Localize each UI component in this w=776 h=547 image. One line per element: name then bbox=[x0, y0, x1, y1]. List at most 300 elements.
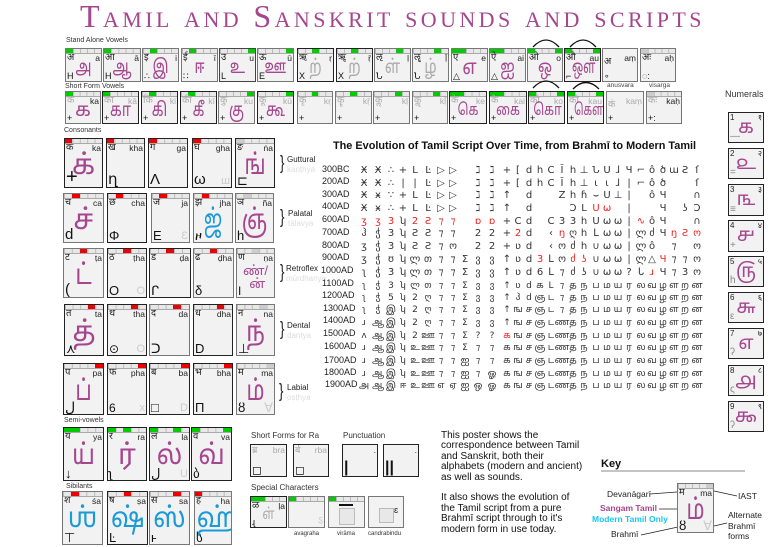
numeral 3 bbox=[728, 184, 764, 216]
cell: nga: ṅa bbox=[264, 143, 273, 153]
cell: kii: की bbox=[182, 95, 192, 106]
cell: na bbox=[236, 304, 275, 356]
label: guttural: kaṇṭhya bbox=[287, 165, 315, 174]
cell: kau: kau bbox=[588, 96, 602, 106]
text block: description: as well as sounds. bbox=[441, 472, 523, 483]
label: retroflex: mūrdhanya bbox=[286, 274, 326, 283]
cell: ya bbox=[63, 427, 104, 481]
cell: sa bbox=[149, 491, 190, 545]
cell: ba: □ bbox=[151, 400, 159, 415]
cell: la: U bbox=[180, 468, 188, 480]
cell: ga: Λ bbox=[150, 171, 160, 188]
cell: kuu: + bbox=[259, 113, 264, 123]
cell: r: ṛ bbox=[329, 53, 332, 63]
cell: kr: कृ bbox=[299, 95, 306, 106]
cell: kaa: का bbox=[104, 95, 114, 106]
cell: cha bbox=[107, 193, 147, 243]
numeral 7: ७ bbox=[758, 329, 762, 338]
cell: rr: ṝ bbox=[368, 53, 371, 63]
cell: jha: jha bbox=[220, 198, 231, 208]
cell: gha: gha bbox=[216, 143, 230, 153]
heading: special characters: Special Characters bbox=[251, 483, 319, 492]
numeral 8: ௮ bbox=[735, 370, 757, 391]
label: alternate brahmi forms bbox=[728, 510, 762, 541]
cell: rr bbox=[336, 48, 373, 82]
cell: am bbox=[602, 48, 638, 82]
cell: gha: ω bbox=[194, 171, 206, 188]
cell: tta: ( bbox=[65, 281, 70, 298]
cell: ke: के bbox=[451, 95, 458, 106]
numeral 6: ६ bbox=[758, 293, 762, 302]
cell: kam: कं bbox=[608, 99, 615, 110]
heading: consonants: Consonants bbox=[64, 127, 101, 134]
row 1500AD bbox=[323, 328, 703, 341]
cell: au: औ bbox=[566, 52, 576, 63]
cell: ta: ⋏ bbox=[66, 341, 76, 356]
cell: l: Ն bbox=[376, 71, 383, 81]
cell: kah: kaḥ bbox=[666, 96, 680, 106]
cell: kuu bbox=[257, 91, 294, 124]
row 1000AD: ʅჭ3ʮლთ⁊⁊Σვვ↑ʋd6ᒪ⁊ძʖ∪ωω?ᒐ ɹ Ч⁊3ო bbox=[362, 266, 701, 278]
cell: ko: को bbox=[530, 95, 540, 106]
numeral 6: ௬ bbox=[736, 297, 756, 318]
cell: rba: rba bbox=[315, 445, 327, 455]
cell: pha bbox=[107, 363, 147, 415]
panel: semi-vowels bbox=[63, 427, 232, 481]
cell: va: va bbox=[221, 432, 230, 442]
cell: dda: ᒋ bbox=[151, 283, 159, 298]
cell: kah bbox=[646, 91, 682, 124]
cell: dda: ड bbox=[151, 252, 156, 263]
cell: au: au bbox=[590, 53, 599, 63]
cell: kuu: कू bbox=[259, 95, 266, 106]
cell: kuu: கூ bbox=[266, 100, 285, 121]
cell: pha: pha bbox=[131, 368, 145, 378]
cell: candrabindu bbox=[368, 496, 404, 528]
cell: ssa: ष bbox=[109, 495, 114, 506]
cell: i: இ bbox=[152, 57, 169, 78]
cell: kr bbox=[297, 91, 333, 124]
key cell: ma bbox=[700, 488, 712, 498]
cell: kl: kḷ bbox=[402, 96, 408, 106]
cell: ra: र bbox=[109, 431, 113, 442]
cell: da: ᑐ bbox=[151, 341, 160, 356]
cell: ai: ai bbox=[517, 53, 524, 63]
text block: description: alphabets (modern and ancient) bbox=[441, 461, 582, 472]
cell: kai: kai bbox=[514, 96, 525, 106]
numeral 9: ௯ bbox=[735, 406, 757, 427]
panel: special characters bbox=[250, 496, 404, 528]
row 700AD: ჰჭ3ʮƧƧ⁊⁊ 22+ 2 d ‹ ŋ ღhᒪωω|ლძЧ ŋƧო bbox=[361, 227, 701, 239]
cell: ga: ग bbox=[150, 142, 155, 153]
cell: nya bbox=[235, 193, 274, 243]
label: retroflex bbox=[280, 262, 326, 283]
cell: ha: ს bbox=[196, 530, 203, 545]
row 1500AD: 1500AD bbox=[323, 328, 356, 338]
cell: ma: ȣ bbox=[238, 400, 245, 415]
label: palatal bbox=[280, 207, 314, 228]
numeral 5: ௫ bbox=[736, 261, 756, 282]
label: sangam tamil: Sangam Tamil bbox=[600, 503, 657, 513]
cell: ah bbox=[640, 48, 676, 82]
cell: sha: ⊤ bbox=[64, 530, 75, 545]
cell: ssa: ஷ் bbox=[111, 502, 144, 533]
numeral 1: १ bbox=[758, 113, 762, 122]
cell: danda: | bbox=[344, 459, 348, 476]
row 1900AD: அஆஇஈஉஊஎஏஐஒஓகஙசஞடணதநபமயரலவழளறன bbox=[359, 380, 703, 391]
cell: la: ل bbox=[151, 466, 160, 481]
cell: tta bbox=[63, 248, 104, 298]
row 200AD: ӾӾ∴||Ŀ▷▷ ℷℷ+[dhCĪh⊥ιιɺ|⌐ôծ ſ bbox=[361, 176, 699, 189]
cell: gha: घ bbox=[194, 142, 200, 153]
icon: combination arcs bbox=[532, 39, 600, 90]
cell: ha: ह bbox=[196, 495, 201, 506]
cell: ja: E bbox=[153, 228, 162, 243]
cell: ah: अः bbox=[642, 52, 651, 63]
cell: tta: ट bbox=[65, 252, 70, 263]
cell: ai: △ bbox=[491, 71, 498, 81]
label: guttural: } bbox=[280, 153, 284, 174]
cell: ma bbox=[236, 363, 275, 415]
cell: ko: கொ bbox=[533, 102, 562, 119]
cell: nga: ङ bbox=[237, 142, 243, 153]
numeral 3: ३ bbox=[758, 185, 762, 194]
cell: sha: śa bbox=[92, 496, 101, 506]
cell: ka consonant: क bbox=[66, 142, 73, 153]
cell: nya: h bbox=[237, 228, 244, 243]
cell: ka bbox=[65, 91, 101, 124]
row 1200AD: ʅჭ5ʮ2ღ⁊⁊Σვვ↑ჰdஞட⁊தநபமயரலவழளறன bbox=[362, 292, 703, 303]
cell: pha: फ bbox=[109, 367, 116, 378]
cell: ah: ◌: bbox=[642, 71, 650, 81]
label: candrabindu: candrabindu bbox=[368, 531, 401, 537]
numeral 7: ʔ bbox=[730, 347, 735, 358]
text block: description: correspondence between Tamil bbox=[441, 440, 579, 451]
cell: ttha: ठ bbox=[109, 252, 115, 263]
numeral 1 bbox=[728, 112, 764, 143]
label: avagraha: avagraha bbox=[294, 531, 319, 537]
cell: da bbox=[149, 304, 190, 356]
numeral 3: ௩ bbox=[737, 189, 755, 210]
cell: u: u bbox=[249, 53, 254, 63]
label: alternate brahmi forms: Alternate bbox=[728, 510, 762, 520]
numeral 5: ५ bbox=[758, 257, 762, 266]
cell: bra: bra bbox=[273, 445, 285, 455]
cell: ll bbox=[412, 48, 449, 82]
cell: kll bbox=[412, 91, 448, 124]
numeral 8: ς bbox=[730, 384, 735, 395]
label: dental: } bbox=[280, 319, 284, 340]
cell: kll: + bbox=[414, 113, 419, 123]
cell: lla: ळ bbox=[252, 500, 259, 511]
cell: ki: ki bbox=[170, 96, 176, 106]
cell: dha: dha bbox=[217, 309, 231, 319]
label: palatal: } bbox=[280, 207, 284, 228]
cell: tha: tha bbox=[133, 309, 145, 319]
cell: ka consonant: க் bbox=[72, 149, 95, 180]
cell: kll: कॣ bbox=[414, 95, 421, 106]
cell: ja: ज bbox=[153, 197, 160, 208]
cell: ya: ய் bbox=[72, 439, 95, 470]
cell: ta: त bbox=[66, 308, 71, 319]
cell: krr bbox=[335, 91, 372, 124]
cell: double danda: || bbox=[385, 459, 394, 476]
cell: cha: Φ bbox=[109, 228, 119, 243]
cell: ba bbox=[149, 363, 190, 415]
cell: ii: ∷ bbox=[183, 71, 189, 81]
cell: u: उ bbox=[221, 52, 226, 63]
cell: bha: bha bbox=[217, 368, 231, 378]
cell: dda bbox=[149, 248, 191, 298]
cell: uu bbox=[257, 48, 294, 82]
label: palatal: tālavya bbox=[288, 219, 313, 228]
panel: stand alone vowels bbox=[65, 48, 676, 82]
cell: kaa: கா bbox=[110, 100, 131, 121]
cell: nna: ண்/ bbox=[243, 263, 268, 278]
label: devanagari: Devanāgarī bbox=[607, 489, 651, 499]
cell: uu: ஊ bbox=[265, 57, 286, 78]
cell: r: X bbox=[299, 71, 305, 81]
label: guttural bbox=[280, 153, 315, 174]
cell: krr: + bbox=[337, 113, 342, 123]
numeral 9: 9 bbox=[730, 402, 734, 411]
numeral 4: ௪ bbox=[737, 225, 755, 246]
cell: kl: कॢ bbox=[375, 95, 382, 106]
cell: nga bbox=[235, 138, 275, 188]
cell: danda: . bbox=[374, 445, 376, 455]
cell: ca bbox=[63, 193, 104, 243]
row 1800AD: ɹஆஇʮஉஊ⁊⁊ஐ⁊ஓகஙசஞடணதநபமயரலவழளறன bbox=[362, 368, 703, 379]
label: modern tamil only: Modern Tamil Only bbox=[592, 514, 668, 524]
cell: dha bbox=[193, 304, 233, 356]
row 1400AD: ɹஆஇʮ2ღ⁊⁊Σვვ↑ஙசஞடணதநபமயரலவழளறன bbox=[362, 317, 703, 328]
cell: a: अ bbox=[67, 52, 74, 63]
cell: ai: ஐ bbox=[500, 57, 515, 78]
cell: am: ∘ bbox=[604, 71, 610, 81]
heading: punctuation: Punctuation bbox=[343, 431, 385, 440]
cell: ga bbox=[148, 138, 188, 188]
row 700AD: 700AD bbox=[322, 227, 350, 237]
numeral 8: ८ bbox=[758, 366, 762, 375]
row 1400AD bbox=[323, 315, 703, 328]
cell: kai: + bbox=[491, 113, 496, 123]
cell: ke: + bbox=[451, 113, 456, 123]
cell: a: a bbox=[95, 53, 100, 63]
numeral 5 bbox=[728, 256, 764, 287]
cell: nya: ஞ் bbox=[242, 204, 267, 235]
cell: pa: प bbox=[65, 367, 70, 378]
cell: na: na bbox=[264, 309, 273, 319]
cell: ku: कु bbox=[220, 95, 227, 106]
cell: tha: O bbox=[136, 343, 145, 355]
cell: la: la bbox=[181, 432, 188, 442]
cell: kii: கீ bbox=[193, 100, 204, 121]
heading: semi-vowels: Semi-vowels bbox=[64, 417, 104, 424]
cell: nna bbox=[236, 248, 275, 298]
numeral 3: 3 bbox=[730, 185, 734, 194]
cell: ra: ra bbox=[137, 432, 145, 442]
cell: sa: sa bbox=[179, 496, 188, 506]
row 1900AD: 1900AD bbox=[325, 379, 358, 389]
cell: ka consonant: + bbox=[66, 166, 78, 188]
cell: ta bbox=[64, 304, 104, 356]
cell: ki: + bbox=[143, 113, 148, 123]
cell: da: द bbox=[151, 308, 156, 319]
cell: bra: ◻ bbox=[252, 463, 262, 477]
cell: ya: ya bbox=[93, 432, 102, 442]
cell: kii: kī bbox=[208, 96, 215, 106]
cell: va bbox=[191, 427, 232, 481]
numeral 2: = bbox=[730, 167, 736, 178]
cell: na: न bbox=[238, 308, 243, 319]
cell: ra: ʅ bbox=[109, 466, 112, 481]
label: brahmi: Brahmī bbox=[611, 529, 638, 539]
cell: nna: ण bbox=[238, 252, 245, 263]
cell: nya: ña bbox=[263, 198, 272, 208]
numeral 9: ९ bbox=[758, 402, 762, 411]
cell: ka: क bbox=[67, 95, 74, 106]
key cell bbox=[677, 483, 714, 533]
cell: nya: ञ bbox=[237, 197, 244, 208]
cell: ya: य bbox=[65, 431, 71, 442]
numeral 7 bbox=[728, 328, 764, 359]
cell: aa bbox=[103, 48, 141, 82]
cell: sha: ஶ் bbox=[68, 502, 97, 533]
cell: kha: kha bbox=[129, 143, 143, 153]
label: retroflex: Retroflex bbox=[286, 264, 318, 273]
cell: uu: ऊ bbox=[259, 52, 266, 63]
label: labial: Labial bbox=[287, 383, 308, 392]
cell: lla: ḷa bbox=[278, 501, 285, 511]
cell: ka: க bbox=[75, 100, 91, 121]
cell: l: ऌ bbox=[376, 52, 383, 63]
label: dental: dantya bbox=[287, 331, 311, 340]
cell: la bbox=[149, 427, 190, 481]
row 1200AD bbox=[322, 290, 703, 303]
cell: aa: आ bbox=[105, 52, 115, 63]
text block: description: and Sanskrit, both their bbox=[441, 451, 544, 462]
cell: jha: ஜ் bbox=[204, 204, 222, 235]
heading: stand alone vowels: Stand Alone Vowels bbox=[66, 37, 128, 44]
cell: kii: + bbox=[182, 113, 187, 123]
cell: o: ஒ bbox=[538, 57, 552, 78]
heading: chart title: The Evolution of Tamil Script Over Time, from Brahmī to Modern Tamil bbox=[333, 140, 696, 152]
cell: ki: कि bbox=[143, 95, 153, 106]
label: labial: oṣṭhya bbox=[287, 393, 311, 402]
cell: nna: ṇa bbox=[264, 253, 273, 263]
numeral 1: — bbox=[730, 131, 740, 142]
cell: kii bbox=[180, 91, 217, 124]
cell: a: அ bbox=[76, 57, 91, 78]
cell: ku: ku bbox=[244, 96, 253, 106]
panel: numerals bbox=[728, 112, 764, 432]
row 1800AD: 1800AD bbox=[324, 367, 357, 377]
key cell: म bbox=[679, 487, 685, 498]
cell: u bbox=[219, 48, 256, 82]
cell: pa: ل bbox=[65, 399, 75, 415]
cell: kl bbox=[373, 91, 410, 124]
cell: ke: கெ bbox=[458, 102, 478, 119]
label: virama: virāma bbox=[337, 531, 355, 537]
cell: ddha: δ bbox=[195, 283, 202, 298]
cell: ba: ba bbox=[179, 368, 188, 378]
cell: ra: ர் bbox=[118, 439, 136, 470]
cell: l bbox=[374, 48, 411, 82]
cell: lla bbox=[250, 496, 287, 528]
numeral 4: ४ bbox=[758, 221, 762, 230]
numeral 2 bbox=[728, 148, 764, 179]
key lines bbox=[601, 470, 745, 536]
cell: aa: ā bbox=[134, 53, 139, 63]
cell: ko: ko bbox=[554, 96, 563, 106]
cell: cha: cha bbox=[131, 198, 145, 208]
cell: danda bbox=[342, 444, 378, 477]
cell: lla: ள் bbox=[262, 506, 275, 523]
cell: pha: 6 bbox=[109, 401, 116, 415]
cell: ma: ma bbox=[261, 368, 273, 378]
cell: au bbox=[564, 48, 601, 82]
cell: kuu: kū bbox=[283, 96, 292, 106]
row 300BC: 300BC bbox=[322, 164, 350, 174]
cell: ai: ऐ bbox=[491, 52, 496, 63]
row 1300AD: 1300AD bbox=[323, 303, 356, 313]
cell: ai bbox=[489, 48, 526, 82]
label: retroflex: } bbox=[280, 262, 284, 283]
numeral 6 bbox=[728, 292, 764, 323]
heading: short form vowels: Short Form Vowels bbox=[65, 83, 124, 90]
cell: tha: थ bbox=[109, 308, 115, 319]
cell: ha bbox=[194, 491, 232, 545]
row 1700AD: 1700AD bbox=[324, 355, 357, 365]
cell: uu: E bbox=[259, 71, 265, 81]
cell: nna: I bbox=[238, 284, 241, 298]
cell: sa: स bbox=[151, 495, 157, 506]
cell: ja: ja bbox=[181, 198, 188, 208]
cell: kau bbox=[567, 91, 604, 124]
cell: nga: ங் bbox=[244, 149, 266, 180]
cell: bha bbox=[193, 363, 233, 415]
cell: bha: भ bbox=[195, 367, 202, 378]
cell: kau: कौ bbox=[569, 95, 579, 106]
cell: ll: Ն bbox=[414, 71, 421, 81]
cell: ttha: O bbox=[109, 283, 119, 298]
row 1100AD: ʅჭ3ʮლთ⁊⁊Σვვ↑ʋdகᒪ⁊தநபமயரலவழளறன bbox=[362, 280, 703, 291]
cell: kaa bbox=[102, 91, 139, 124]
numeral 1: ௧ bbox=[738, 117, 754, 138]
cell: kam: kaṃ bbox=[626, 96, 642, 106]
cell: va: வ் bbox=[198, 439, 225, 470]
row 800AD: 800AD bbox=[322, 240, 350, 250]
label: alternate brahmi forms: Brahmī bbox=[728, 520, 755, 530]
cell: i: i bbox=[175, 53, 177, 63]
cell: kau: + bbox=[569, 113, 574, 123]
cell: ssa: ṣa bbox=[137, 496, 146, 506]
cell: ttha: O bbox=[136, 285, 145, 297]
cell: nga: ⊏ bbox=[237, 173, 248, 188]
label: visarga: visarga bbox=[649, 82, 670, 89]
cell: nna: ன் bbox=[249, 276, 265, 291]
row 1600AD: 1600AD bbox=[324, 341, 357, 351]
cell: sa: ⱶ bbox=[151, 530, 157, 545]
row 400AD: Ӿӿ∴+LĿ▷▷ ℷℷ↑ d ƆL Uω | Ч ʖƆ bbox=[361, 203, 701, 214]
cell: r: ற் bbox=[309, 57, 322, 78]
cell: rr: X bbox=[338, 71, 344, 81]
cell: kai bbox=[489, 91, 527, 124]
cell: rr: ற் bbox=[348, 57, 361, 78]
cell: rba: र्ब bbox=[295, 445, 300, 456]
cell: krr: कॄ bbox=[337, 95, 344, 106]
heading: key: Key bbox=[601, 458, 621, 470]
